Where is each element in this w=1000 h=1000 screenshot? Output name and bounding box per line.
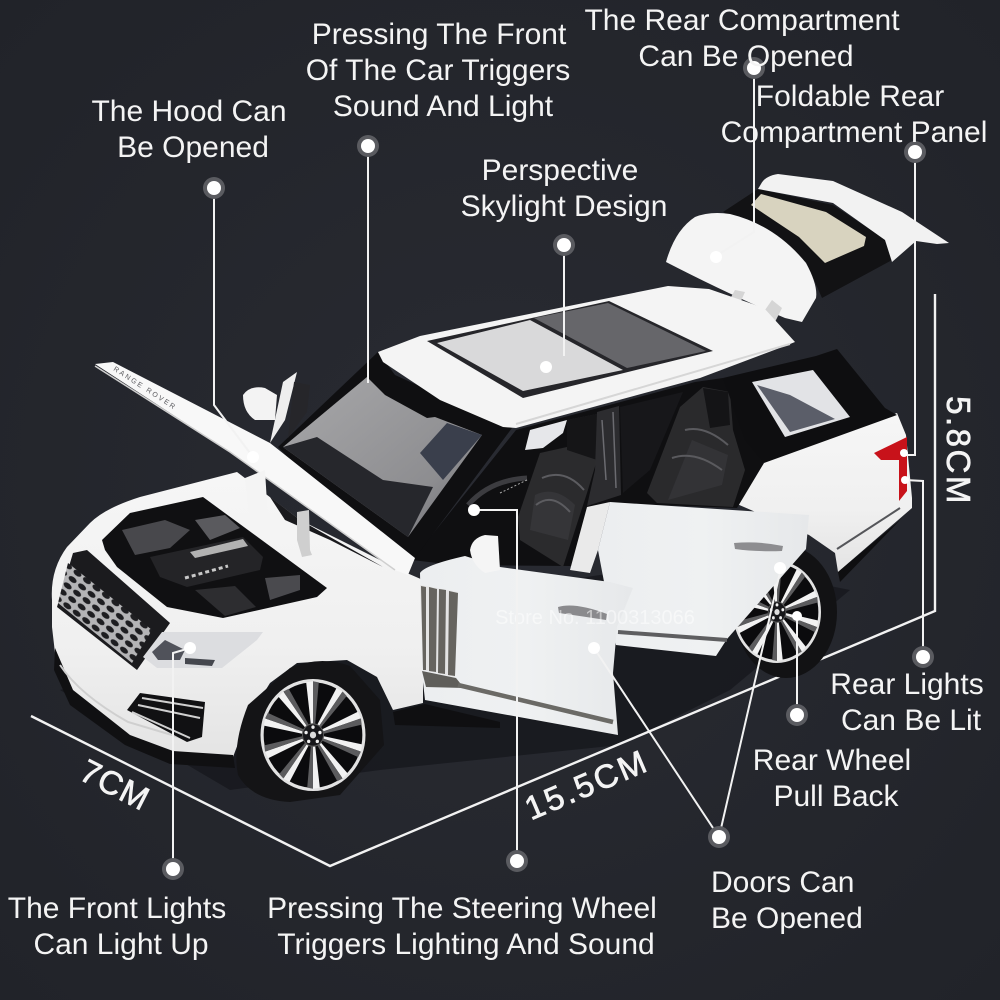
callout: rear wheel: Pull Back: [773, 780, 900, 813]
rear door chrome strip: [618, 632, 727, 640]
front door handle: [558, 606, 607, 620]
dimension label: 5.8CM height: 5.8CM: [940, 396, 977, 506]
callout: rear compartment: [584, 4, 900, 263]
front lower bumper black strip: [54, 648, 235, 768]
window gap through the interior: [525, 420, 567, 450]
front door mirror: [470, 535, 500, 573]
rear door handle: [734, 542, 783, 551]
front wheel: [236, 661, 384, 802]
grille surround: [57, 550, 170, 670]
callout: front lights: The Front Lights: [8, 892, 226, 925]
seat through glass: [420, 423, 482, 480]
callout: hood: The Hood Can: [91, 95, 287, 128]
dimension lines: [31, 294, 935, 866]
front door sill: [422, 671, 464, 688]
callout: steering wheel: [267, 504, 657, 961]
callout: doors: Be Opened: [711, 902, 863, 935]
roof rail highlight: [516, 344, 790, 424]
callout: skylight: Skylight Design: [461, 190, 667, 223]
callout: skylight: Perspective: [482, 154, 638, 187]
b pillar: [587, 406, 621, 506]
dimension label: 15.5CM length: 15.5CM: [519, 742, 654, 827]
interior opening: [412, 378, 764, 573]
engine parts: [122, 520, 190, 555]
headlight: [143, 632, 263, 668]
callout: steering wheel: Triggers Lighting And Sound: [277, 928, 655, 961]
steering wheel: [468, 478, 527, 505]
hood lettering: RANGE ROVER: [112, 366, 178, 412]
rear dark panel: [620, 392, 683, 493]
callout: doors: [588, 562, 863, 935]
tailgate hinge: [725, 290, 782, 322]
callout: rear lights: Can Be Lit: [841, 704, 982, 737]
rear door open: [598, 502, 809, 656]
watermark: Store No. 1100313066: [495, 607, 695, 629]
callout: skylight: [461, 154, 667, 373]
tail light: [874, 437, 907, 501]
rear seat: [647, 387, 745, 507]
hood hinge white: [245, 470, 268, 522]
dashboard through glass: [283, 437, 433, 537]
callout: steering wheel: Pressing The Steering Wheel: [267, 892, 657, 925]
chrome grille: [58, 563, 152, 663]
side mirror: [243, 372, 310, 443]
callout: foldable panel: [721, 80, 987, 457]
door vent stripes: [420, 585, 458, 677]
callout: rear lights: Rear Lights: [830, 668, 984, 701]
callout: rear compartment: Can Be Opened: [638, 40, 854, 73]
callout: foldable panel: Compartment Panel: [721, 116, 987, 149]
skylight rear glass: [534, 303, 706, 368]
skylight front glass: [437, 320, 623, 391]
rear underside: [838, 515, 905, 582]
rear chrome trim: [837, 508, 900, 549]
callout: doors: Doors Can: [711, 866, 854, 899]
quarter window: [752, 370, 850, 437]
cowl slit under the hood: [270, 497, 383, 567]
front body: [52, 472, 423, 757]
tailgate rear glass: [751, 194, 866, 263]
car model: [52, 174, 949, 802]
floor shadow under car: [60, 560, 850, 790]
callout: rear lights: [830, 476, 984, 737]
callout: rear wheel: Rear Wheel: [753, 744, 911, 777]
engine cover: [150, 537, 263, 587]
callout: rear wheel: [753, 611, 911, 813]
open hood: [95, 362, 415, 575]
callout: front sound and light: Pressing The Front: [312, 18, 567, 51]
door pillar white: [570, 502, 610, 573]
front door open: [420, 535, 633, 735]
callout: hood: [91, 95, 287, 463]
open tailgate: [666, 174, 949, 322]
sill under the front body: [393, 704, 500, 728]
windshield frame: [278, 352, 512, 572]
callout: hood: Be Opened: [117, 131, 269, 164]
roof: [378, 286, 795, 428]
engine bay: [102, 497, 327, 618]
callout: front lights: Can Light Up: [33, 928, 209, 961]
callout: front sound and light: [306, 18, 570, 383]
lower air intake: [127, 693, 205, 742]
dimension label: 7CM width: 7CM: [74, 752, 156, 818]
skylight frame: [427, 301, 713, 398]
windshield glass: [283, 377, 482, 537]
hood strut: [297, 510, 312, 557]
rear body: [737, 413, 912, 572]
callout: front sound and light: Of The Car Triggers: [306, 54, 570, 87]
quarter panel black: [723, 349, 897, 463]
tailgate black frame: [723, 189, 892, 298]
callout: foldable panel: Foldable Rear: [756, 80, 944, 113]
tailgate lower panel: [666, 213, 816, 322]
rear wheel: [733, 546, 837, 678]
callout: front lights: [8, 642, 226, 961]
bumper chrome trim: [60, 665, 182, 738]
callout: rear compartment: The Rear Compartment: [584, 4, 900, 37]
intake and air box: [195, 586, 256, 616]
front seat: [518, 414, 597, 567]
callout: front sound and light: Sound And Light: [333, 90, 554, 123]
tailgate upper white frame: [758, 174, 949, 262]
